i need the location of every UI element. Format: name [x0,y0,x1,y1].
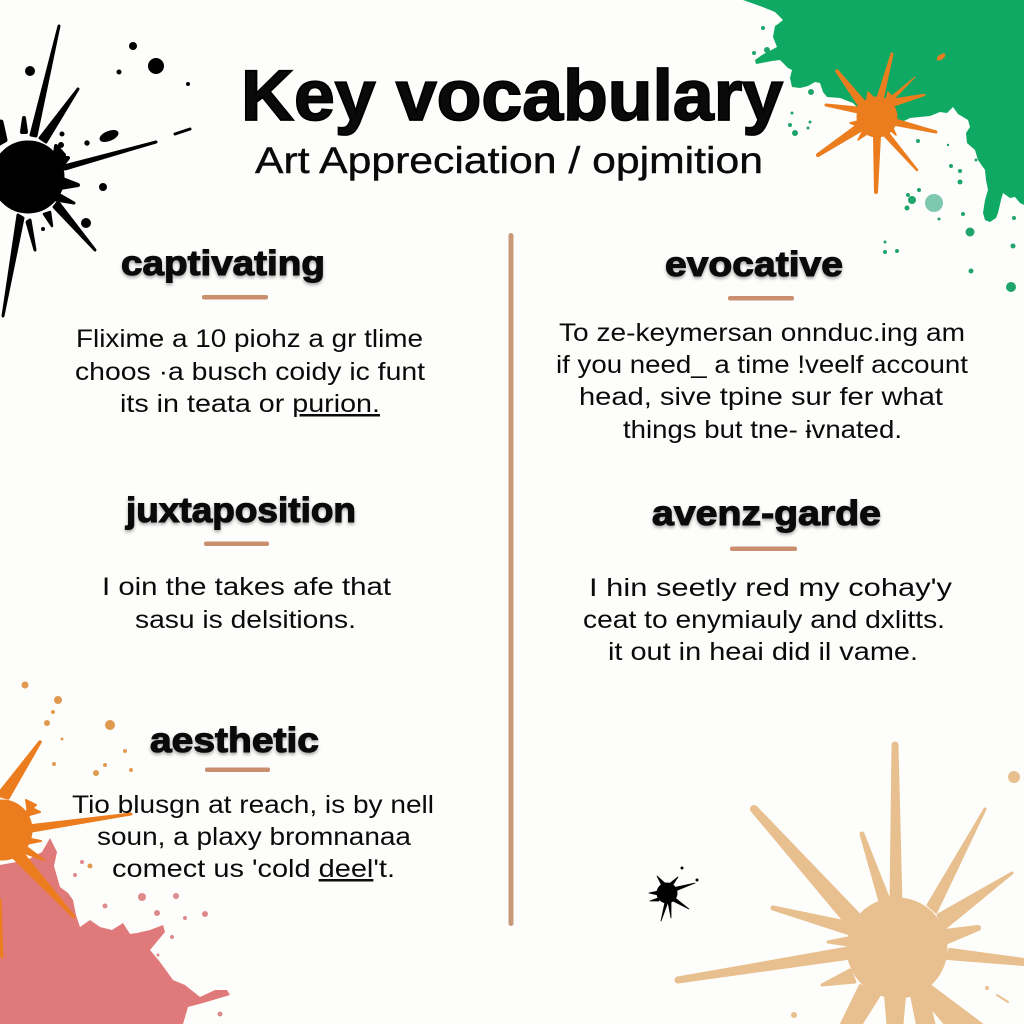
term: evocative: if you need_ a time !veelf account [556,351,968,379]
term: captivating: its in teata or purion. [120,390,380,418]
term: evocative: To ze-keymersan onnduc.ing am [559,319,965,347]
term: evocative [556,245,968,444]
term: aesthetic: soun, a plaxy bromnanaa [97,823,411,851]
term: evocative: head, sive tpine sur fer what [579,383,943,411]
center divider [508,233,514,926]
term: juxtaposition: I oin the takes afe that [102,573,391,601]
term: captivating [75,244,425,418]
term: captivating: Flixime a 10 piohz a gr tlime [76,325,423,353]
splash: pink paint bottom left [0,838,230,1024]
term: juxtaposition [102,491,391,634]
term: avenz-garde [583,494,953,666]
term: avenz-garde: it out in heai did il vame. [608,638,918,666]
splash: green paint top right [743,0,1024,292]
term: captivating: choos ·a busch coidy ic funt [75,358,425,386]
term: aesthetic: comect us 'cold deel 't. [112,855,395,883]
term: captivating: captivating [121,244,325,283]
term: avenz-garde: ceat to enymiauly and dxlitts. [583,606,945,634]
title: Key vocabulary [241,57,784,136]
splash: black ink top left [0,26,190,316]
term: evocative: things but tne- ɨvnated. [623,416,902,444]
splash: small black ink [649,867,698,921]
term: aesthetic [72,721,434,883]
term: juxtaposition: sasu is delsitions. [135,606,356,634]
term: aesthetic: aesthetic [150,721,319,760]
term: avenz-garde: I hin seetly red my cohay'y [589,574,953,602]
splash: orange paint left [0,682,133,957]
term: avenz-garde: avenz-garde [652,494,881,533]
splash: orange on green [818,52,947,192]
term: aesthetic: Tio blusgn at reach, is by nell [72,791,434,819]
term: juxtaposition: juxtaposition [125,491,356,530]
subtitle: Art Appreciation / opjmition [255,140,763,181]
term: evocative: evocative [665,245,843,284]
splash: beige paint bottom right [678,745,1024,1024]
